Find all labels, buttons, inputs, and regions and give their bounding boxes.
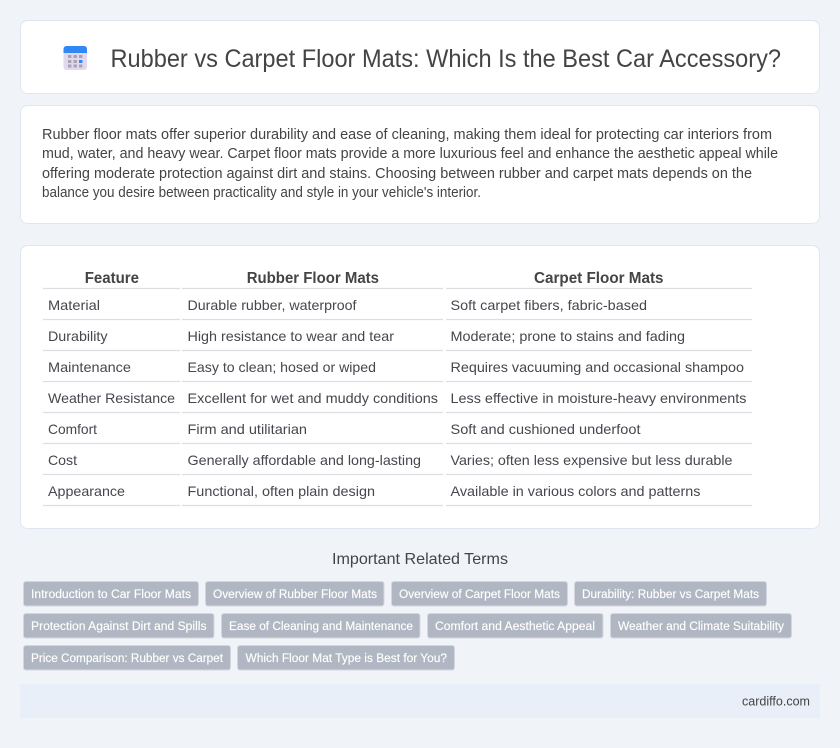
footer: [20, 684, 820, 718]
row: comfort: Firm and utilitarian: [188, 421, 307, 437]
row: weather resistance: Less effective in moisture-heavy environments: [450, 390, 746, 406]
title: Rubber vs Carpet Floor Mats: Which Is the Best Car Accessory?: [110, 45, 781, 73]
panel: introduction text: balance you desire between practicality and style in your vehicle's interior.: [42, 185, 481, 201]
row: comfort: Soft and cushioned underfoot: [450, 421, 641, 437]
row: durability: Durability: [48, 328, 108, 344]
row: cost: Generally affordable and long-lasting: [188, 452, 421, 468]
related term tags: Price Comparison: Rubber vs Carpet: [31, 651, 224, 665]
heading: important related terms: Important Related Terms: [332, 551, 508, 568]
row: appearance: Available in various colors and patterns: [450, 483, 700, 499]
related term tags: Weather and Climate Suitability: [618, 619, 785, 633]
panel: introduction text: [20, 106, 820, 224]
row: weather resistance: Weather Resistance: [48, 390, 175, 406]
row: maintenance: Maintenance: [48, 359, 131, 375]
related term tags: Introduction to Car Floor Mats: [31, 587, 191, 601]
row: cost: Cost: [48, 452, 77, 468]
table header: Carpet Floor Mats: [534, 270, 664, 287]
row: weather resistance: Excellent for wet and muddy conditions: [188, 390, 438, 406]
related term tags: Which Floor Mat Type is Best for You?: [246, 651, 447, 665]
related term tags: Protection Against Dirt and Spills: [31, 619, 206, 633]
row: durability: Moderate; prone to stains and fading: [450, 328, 685, 344]
panel: introduction text: Rubber floor mats offer superior durability and ease of cleaning, making them ideal for protecting car interiors from: [42, 127, 772, 143]
panel: introduction text: offering moderate protection against dirt and stains. Choosing between rubber and carpet mats depends on the: [42, 166, 752, 182]
table header: Rubber Floor Mats: [247, 270, 379, 287]
related term tags: Durability: Rubber vs Carpet Mats: [582, 587, 759, 601]
row: material: [48, 297, 647, 313]
row: comfort: [48, 421, 641, 437]
panel: comparison table: [20, 246, 820, 528]
related term tags: Comfort and Aesthetic Appeal: [435, 619, 595, 633]
row: cost: Varies; often less expensive but less durable: [450, 452, 733, 468]
table header: Feature: [85, 270, 139, 287]
row: appearance: [48, 483, 700, 499]
row: weather resistance: [48, 390, 746, 406]
row: durability: [48, 328, 685, 344]
related term tags: Overview of Rubber Floor Mats: [213, 587, 377, 601]
table header: [85, 270, 663, 287]
row: maintenance: [48, 359, 744, 375]
row: maintenance: Easy to clean; hosed or wiped: [188, 359, 376, 375]
row: comfort: Comfort: [48, 421, 97, 437]
panel: introduction text: mud, water, and heavy wear. Carpet floor mats provide a more luxurious feel and enhance the aesthetic appeal while: [42, 146, 778, 162]
row: material: Material: [48, 297, 100, 313]
row: durability: High resistance to wear and tear: [188, 328, 394, 344]
related term tags: Ease of Cleaning and Maintenance: [229, 619, 413, 633]
row: appearance: Functional, often plain design: [188, 483, 375, 499]
related term tags: Overview of Carpet Floor Mats: [399, 587, 560, 601]
row: appearance: Appearance: [48, 483, 125, 499]
icon: calendar: [64, 46, 87, 70]
row: cost: [48, 452, 733, 468]
row: maintenance: Requires vacuuming and occasional shampoo: [450, 359, 744, 375]
row: material: Durable rubber, waterproof: [188, 297, 357, 313]
row: material: Soft carpet fibers, fabric-based: [450, 297, 647, 313]
footer: cardiffo.com: [742, 694, 810, 708]
panel: title header: [20, 20, 820, 94]
related term tags: [24, 582, 792, 670]
